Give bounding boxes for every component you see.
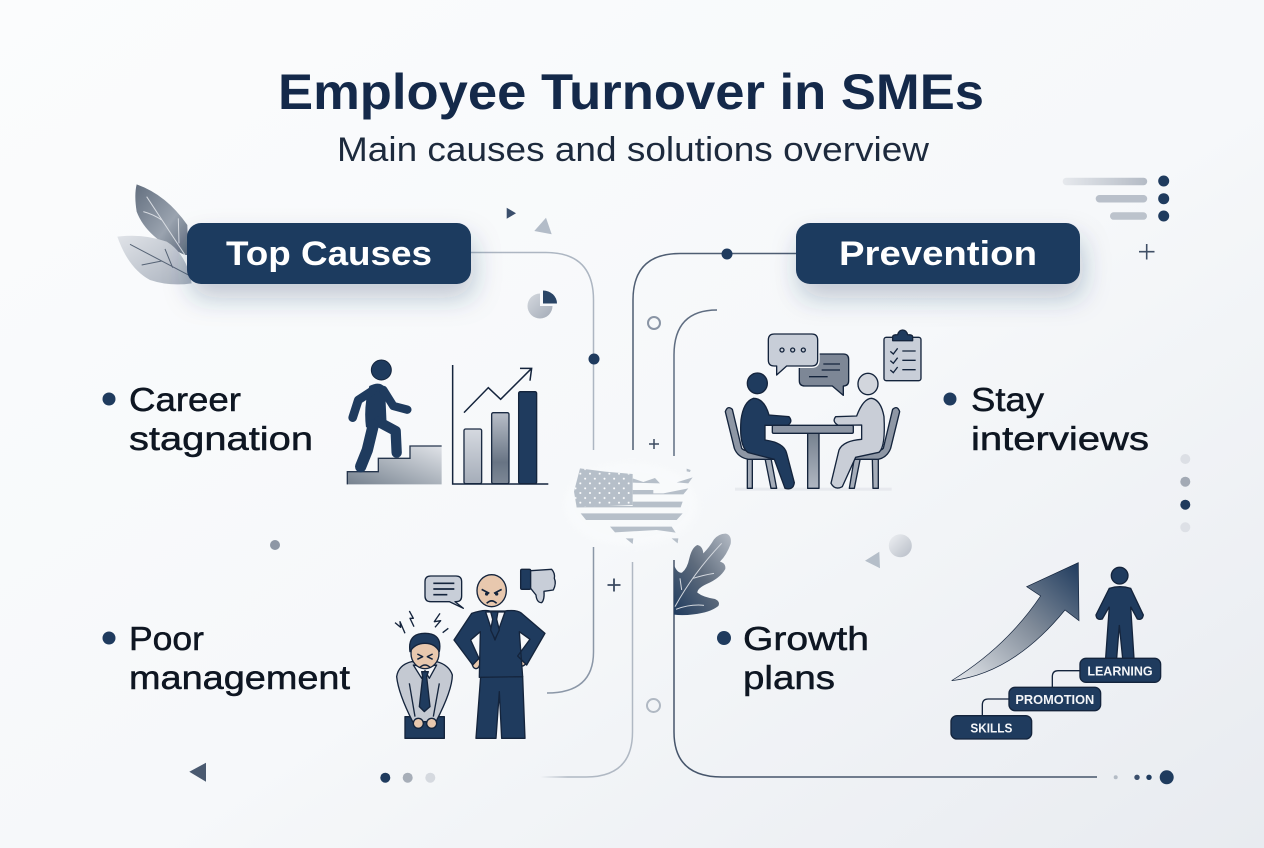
prevention: Stay interviews: Stay: [971, 381, 1045, 418]
connector nodes: [588, 248, 732, 712]
prevention: Growth plans: [717, 620, 869, 696]
title: Employee Turnover in SMEs: [278, 64, 984, 120]
subtitle: Main causes and solutions overview: [337, 131, 929, 169]
step: skills: SKILLS: [970, 720, 1012, 735]
decorative vertical dots, right: [1180, 454, 1190, 532]
heading: Top Causes: [187, 223, 471, 284]
step: promotion: PROMOTION: [1015, 692, 1094, 707]
manager: [454, 575, 545, 738]
decorative triangle and dots, bottom left: [189, 763, 435, 783]
heading: Top Causes: Top Causes: [226, 235, 432, 273]
heading: Prevention: [796, 223, 1080, 284]
speech bubble: [425, 576, 463, 608]
icon: person climbing stairs: [347, 360, 442, 484]
icon: US flag map: [565, 463, 698, 547]
icon: decorative leaves: [117, 184, 192, 284]
icon: growth arrow, person and steps: [951, 563, 1161, 739]
step: learning: LEARNING: [1087, 663, 1153, 678]
decorative sphere and triangle: [865, 534, 912, 568]
icon: growth bar chart: [453, 365, 548, 484]
prevention: Growth plans: Growth: [743, 620, 869, 657]
icon: small pie chart: [528, 290, 557, 318]
heading: Prevention: Prevention: [839, 235, 1037, 273]
step: promotion: [1009, 687, 1101, 711]
prevention: Stay interviews: [944, 381, 1149, 457]
decorative bars and dots, top right: [1063, 176, 1169, 260]
step: skills: [951, 716, 1032, 739]
person: [1096, 567, 1143, 658]
decorative dots, bottom right: [1114, 770, 1174, 784]
rising arrow: [952, 563, 1079, 681]
small shapes near Top Causes: [507, 208, 552, 234]
cause: Poor management: [102, 620, 350, 696]
decorative dot, lower left: [270, 540, 280, 550]
icon: two people talking across a table: [725, 330, 921, 491]
icon: oak leaf: [674, 534, 731, 615]
cause: Career stagnation: Career: [129, 381, 241, 418]
connector lines: [471, 252, 1097, 777]
cause: Poor management: management: [129, 659, 350, 696]
cause: Poor management: Poor: [129, 620, 204, 657]
cause: Career stagnation: [102, 381, 313, 457]
step: learning: [1080, 658, 1161, 682]
employee: [395, 611, 452, 738]
icon: angry manager and stressed employee: [395, 569, 555, 738]
prevention: Stay interviews: interviews: [971, 420, 1149, 457]
prevention: Growth plans: plans: [743, 659, 835, 696]
cause: Career stagnation: stagnation: [129, 420, 313, 457]
thumbs down: [521, 569, 555, 603]
